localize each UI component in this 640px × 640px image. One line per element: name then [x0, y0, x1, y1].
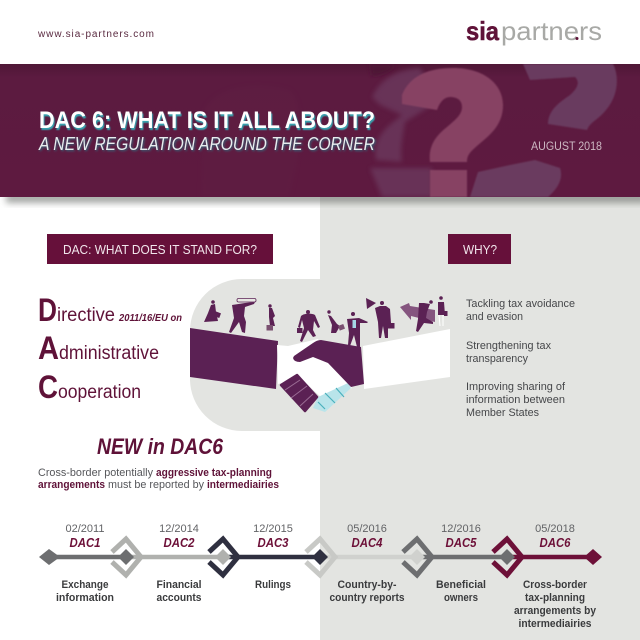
reason 1: and evasion — [466, 311, 523, 323]
right grey background panel — [320, 197, 640, 640]
reason 3 — [466, 381, 566, 419]
acronym text block: irective — [57, 305, 115, 326]
timeline node diamonds — [39, 549, 602, 565]
milestone DAC5 — [436, 523, 486, 604]
dark faint question mark far left — [200, 85, 300, 197]
milestone DAC5: 12/2016 — [441, 523, 481, 535]
new in DAC6 description — [38, 467, 279, 491]
milestone DAC5: owners — [444, 592, 478, 604]
milestone DAC6: arrangements by — [514, 605, 596, 617]
figure: woman standing — [266, 304, 275, 330]
figure: man with binoculars — [229, 298, 256, 333]
figure: walking man with case — [297, 310, 320, 342]
figure: runner carrying arrow — [400, 300, 435, 332]
figure: woman at right end — [438, 296, 448, 326]
cyan shirt cuff — [313, 383, 351, 412]
banner shadow — [6, 193, 640, 203]
milestone DAC3: Rulings — [255, 579, 291, 591]
milestone DAC6 — [514, 523, 596, 630]
right question mark — [523, 64, 617, 130]
reason 1 — [466, 298, 575, 323]
milestone DAC4: country reports — [330, 592, 404, 604]
milestone DAC2: Financial — [156, 579, 202, 591]
right sleeve — [363, 329, 450, 389]
figure: man in suit with blue shirt — [347, 312, 368, 347]
main question mark — [402, 68, 503, 197]
acronym text block: C — [38, 369, 58, 405]
heading: DAC what does it stand for: DAC: WHAT DOES IT STAND FOR? — [63, 242, 257, 257]
acronym text block: ooperation — [58, 382, 141, 403]
acronym text block: dministrative — [59, 343, 159, 364]
figure: man with megaphone — [366, 298, 394, 338]
milestone DAC4: Country-by- — [338, 579, 397, 591]
milestone DAC3: 12/2015 — [253, 523, 293, 535]
timeline line segments — [49, 555, 593, 559]
new in DAC6 description: Cross-border potentially — [38, 467, 153, 479]
why list — [466, 298, 575, 419]
heading: new in DAC6: NEW in DAC6 — [97, 434, 224, 459]
milestone DAC6: intermediairies — [518, 618, 592, 630]
website url: www.sia-partners.com — [37, 29, 154, 40]
milestone DAC1: Exchange — [62, 579, 108, 591]
milestone DAC6: 05/2018 — [535, 523, 575, 535]
new in DAC6 description: must be reported by — [108, 479, 204, 491]
illustration: handshake with business people — [190, 279, 450, 431]
white hand — [277, 339, 352, 398]
milestone DAC3: DAC3 — [258, 536, 289, 550]
milestone DAC1: information — [56, 592, 114, 604]
milestone DAC1: DAC1 — [70, 536, 101, 550]
reason 2: transparency — [466, 353, 528, 365]
reason 2 — [466, 340, 551, 365]
heading: DAC what does it stand for — [47, 234, 273, 264]
milestone DAC4 — [330, 523, 404, 604]
subtitle: A NEW REGULATION AROUND THE CORNER — [38, 134, 375, 154]
reason 3: Member States — [466, 407, 539, 419]
icon: question marks — [370, 64, 618, 197]
reason 1: Tackling tax avoidance — [466, 298, 575, 310]
heading: why — [448, 234, 511, 264]
banner — [0, 64, 640, 197]
acronym text block: A — [38, 330, 59, 366]
date: AUGUST 2018 — [531, 141, 602, 153]
heading: why: WHY? — [463, 242, 497, 257]
acronym text block: 2011/16/EU on — [118, 313, 182, 324]
new in DAC6 description: arrangements — [38, 479, 105, 491]
title: DAC 6: WHAT IS IT ALL ABOUT? — [39, 107, 375, 134]
milestone DAC2: DAC2 — [164, 536, 195, 550]
figure: woman with briefcase — [327, 310, 345, 333]
milestone DAC5: Beneficial — [436, 579, 486, 591]
reason 3: Improving sharing of — [466, 381, 566, 393]
figure: woman with bag — [204, 300, 221, 322]
new in DAC6 description: intermediairies — [207, 479, 279, 491]
milestone DAC3 — [253, 523, 293, 591]
acronym text block: D — [38, 292, 57, 328]
milestone DAC6: Cross-border — [523, 579, 588, 591]
logo: sia partners: sia — [466, 16, 499, 46]
logo: sia partners: partners — [501, 16, 602, 46]
reason 3: information between — [466, 394, 565, 406]
grey rounded backdrop — [190, 279, 320, 431]
reason 2: Strengthening tax — [466, 340, 551, 352]
timeline chevron diamonds — [112, 539, 522, 575]
dark hand — [293, 340, 364, 387]
milestone DAC1: 02/2011 — [66, 523, 104, 535]
timeline — [39, 523, 602, 630]
new in DAC6 description: aggressive tax-planning — [156, 467, 272, 479]
milestone DAC1 — [56, 523, 114, 604]
milestone DAC5: DAC5 — [446, 536, 477, 550]
left sleeve — [190, 328, 278, 389]
lower purple blob — [470, 160, 561, 197]
milestone DAC4: DAC4 — [352, 536, 383, 550]
milestone DAC6: DAC6 — [540, 536, 571, 550]
milestone DAC6: tax-planning — [525, 592, 585, 604]
dark cuff — [281, 375, 317, 411]
milestone DAC4: 05/2016 — [347, 523, 387, 535]
milestone DAC2: accounts — [156, 592, 202, 604]
purple question mark behind main — [370, 67, 432, 197]
acronym text block — [38, 292, 182, 405]
milestone DAC2 — [156, 523, 202, 604]
dark question mark behind — [374, 70, 383, 74]
milestone DAC2: 12/2014 — [159, 523, 199, 535]
